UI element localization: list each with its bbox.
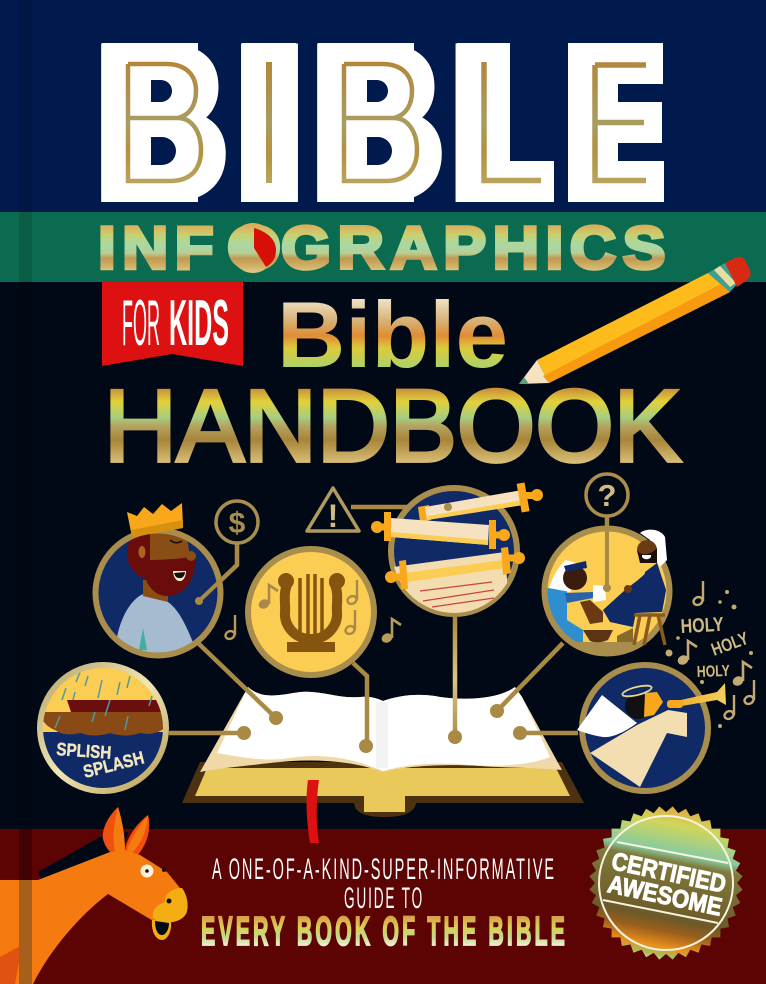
tagline text: GUIDE TO: [344, 882, 424, 915]
title: BIBLE: B: [311, 5, 444, 240]
circle: angel with trumpet: [577, 665, 726, 791]
circle: king David: [96, 501, 258, 660]
illustration: open book: [182, 687, 584, 817]
title: BIBLE: E: [565, 5, 664, 240]
icon: red bookmark ribbon: [307, 780, 319, 843]
seated man overlapping the ring: [634, 530, 667, 645]
badge: For Kids ribbon: [102, 282, 243, 366]
icon: lyre: [278, 573, 345, 652]
title: BIBLE: L: [450, 5, 551, 240]
callout: question bubble: ?: [598, 478, 616, 513]
subtitle: INFOGRAPHICS: INF: [98, 214, 220, 282]
book cover: KIDS: [169, 286, 229, 359]
holy text and music notes: HOLY: [680, 614, 725, 638]
music notes on lyre: [257, 580, 358, 635]
tagline text: [201, 853, 568, 954]
circle: scrolls: [371, 483, 543, 620]
text: Splish Splash: SPLISH: [56, 739, 112, 763]
holy text and music notes: HOLY: [709, 628, 751, 660]
angel head and halo: [621, 683, 663, 719]
holy text and music notes: [666, 581, 755, 728]
subtitle: INFOGRAPHICS: GRAPHICS: [281, 214, 672, 282]
icon: warning triangle: !: [328, 498, 338, 534]
circle: lyre: [248, 549, 374, 675]
callout: question bubble: [586, 474, 628, 516]
title: Bible: Bible: [277, 282, 508, 387]
subtitle: INFOGRAPHICS: O: [227, 214, 281, 282]
illustration: donkey: [0, 807, 188, 984]
icon: pencil: [519, 257, 751, 384]
title: BIBLE: I: [232, 5, 307, 240]
text: Splish Splash: SPLASH: [81, 747, 146, 782]
callout: dollar bubble: [195, 501, 258, 605]
title: BIBLE: [95, 5, 668, 240]
circle: ark in rain: [37, 662, 169, 794]
icon: crown: [127, 503, 183, 537]
callout: dollar bubble: $: [229, 507, 246, 540]
badge: For Kids ribbon: FOR: [122, 286, 160, 359]
angel wing: [577, 695, 637, 737]
subtitle: INFOGRAPHICS: [98, 214, 672, 282]
connector lines from circles to the open book: [199, 507, 607, 601]
text: Splish Splash: [56, 739, 146, 782]
badge: certified awesome seal: CERTIFIED: [609, 847, 728, 899]
holy text and music notes: HOLY: [697, 663, 730, 681]
title: HANDBOOK: HANDBOOK: [104, 369, 681, 483]
badge: certified awesome seal: AWESOME: [605, 870, 724, 922]
music notes: [224, 615, 401, 644]
icon: warning triangle: [307, 488, 359, 534]
icon: trumpet: [667, 683, 726, 708]
badge: certified awesome seal: [590, 806, 742, 960]
title: BIBLE: B: [95, 5, 228, 240]
circle: foot washing: [544, 474, 670, 662]
connectors over the book: [169, 617, 578, 752]
icon: scroll handles and rolls: [371, 483, 543, 589]
